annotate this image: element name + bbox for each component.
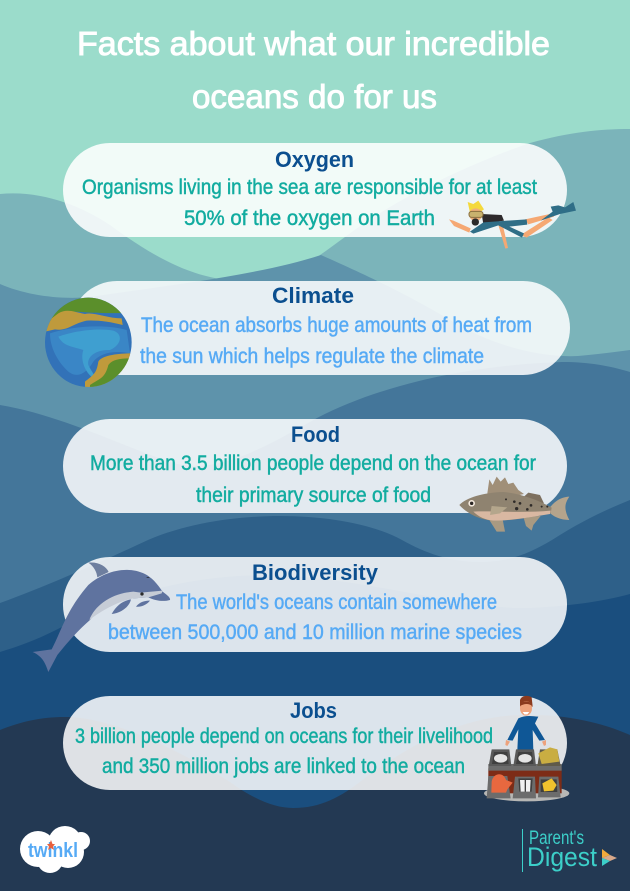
icon: fish [459, 477, 569, 532]
text: food fact: their primary source of food [196, 484, 431, 507]
panel: biodiversity [63, 557, 567, 652]
title [77, 25, 550, 115]
icon: scuba diver [449, 201, 576, 249]
panel: climate [70, 281, 570, 375]
panel: oxygen [63, 143, 567, 237]
icon: dolphin [33, 563, 170, 672]
text: biodiversity fact: The world's oceans contain somewhere [176, 591, 497, 614]
logo: parent's digest: Parent's [529, 828, 584, 849]
text: food fact: More than 3.5 billion people depend on the ocean for [90, 452, 536, 475]
text: climate fact: The ocean absorbs huge amounts of heat from [141, 314, 532, 337]
title: Facts about what our incredible [77, 25, 550, 62]
logo: parent's digest: Digest [527, 842, 597, 872]
logo: twinkl [20, 826, 90, 873]
text: oxygen fact: Organisms living in the sea are responsible for at least [82, 176, 537, 199]
text: jobs fact: 3 billion people depend on oceans for their livelihood [75, 725, 493, 748]
title: oceans do for us [192, 78, 437, 115]
panel: jobs [63, 696, 567, 790]
text: biodiversity fact [108, 591, 522, 644]
text: food fact [90, 452, 536, 507]
heading: food: Food [291, 422, 340, 447]
panel: food [63, 419, 567, 513]
text: oxygen fact: 50% of the oxygen on Earth [184, 207, 435, 230]
heading: jobs: Jobs [290, 698, 337, 723]
icon: earth globe [45, 298, 132, 387]
text: climate fact: the sun which helps regulate the climate [140, 345, 484, 368]
heading: biodiversity: Biodiversity [252, 560, 379, 585]
logo: parent's digest [522, 828, 617, 872]
text: climate fact [140, 314, 532, 368]
logo: twinkl: twinkl [28, 840, 78, 862]
text: jobs fact [75, 725, 493, 778]
text: oxygen fact [82, 176, 537, 230]
text: jobs fact: and 350 million jobs are linked to the ocean [102, 755, 465, 778]
icon: fish market stall [484, 696, 569, 801]
heading: oxygen: Oxygen [275, 147, 354, 172]
text: biodiversity fact: between 500,000 and 10 million marine species [108, 621, 522, 644]
heading: climate: Climate [272, 283, 354, 308]
